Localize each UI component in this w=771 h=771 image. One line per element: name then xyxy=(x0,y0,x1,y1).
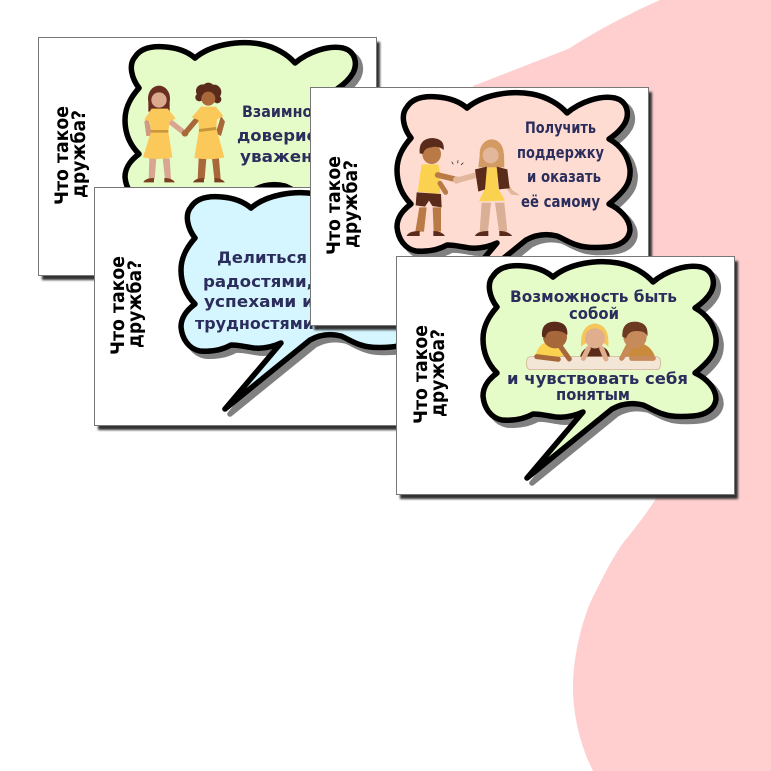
bubble text: и чувствовать себя xyxy=(507,369,688,388)
bubble text xyxy=(507,287,688,404)
illustration: three children at a table xyxy=(527,322,660,370)
bubble text: успехами и xyxy=(204,292,314,311)
card 2: support: дружба? xyxy=(340,160,362,248)
bubble text xyxy=(195,248,320,333)
bubble text: и оказать xyxy=(527,167,601,186)
bubble text: понятым xyxy=(556,385,630,404)
bubble text xyxy=(517,118,604,211)
card 2: support xyxy=(310,88,652,330)
question label: Что такое xyxy=(410,325,432,424)
card 3: sharing joys: дружба? xyxy=(124,260,146,348)
bubble text: собой xyxy=(569,304,619,323)
bubble text xyxy=(237,102,336,166)
card 4: be yourself: дружба? xyxy=(427,329,449,417)
illustration: two girls holding hands xyxy=(143,83,225,182)
background pink blob xyxy=(473,0,771,771)
bubble text: радостями, xyxy=(203,272,313,291)
bubble text: трудностями. xyxy=(195,314,320,333)
card 4: be yourself xyxy=(396,256,738,499)
bubble text: поддержку xyxy=(517,143,604,162)
bubble text: уважение xyxy=(240,147,336,166)
question label: Что такое xyxy=(323,156,345,255)
bubble text: Делиться xyxy=(217,248,307,267)
speech bubble: green xyxy=(125,43,363,264)
card 3: sharing joys xyxy=(94,188,436,430)
speech bubble: blue xyxy=(181,193,419,414)
bubble text: Взаимное xyxy=(242,102,322,121)
speech bubble: pink xyxy=(397,93,635,314)
card 1: mutual trust: дружба? xyxy=(68,110,90,198)
bubble text: её самому xyxy=(521,192,600,211)
illustration: boy and girl shaking hands xyxy=(407,138,520,236)
bubble text: Возможность быть xyxy=(510,287,677,306)
bubble text: доверие и xyxy=(237,126,335,145)
question label: Что такое xyxy=(51,106,73,205)
question label: Что такое xyxy=(107,256,129,355)
speech bubble: green xyxy=(483,262,721,483)
bubble text: Получить xyxy=(525,118,596,137)
card 1: mutual trust xyxy=(38,38,380,280)
